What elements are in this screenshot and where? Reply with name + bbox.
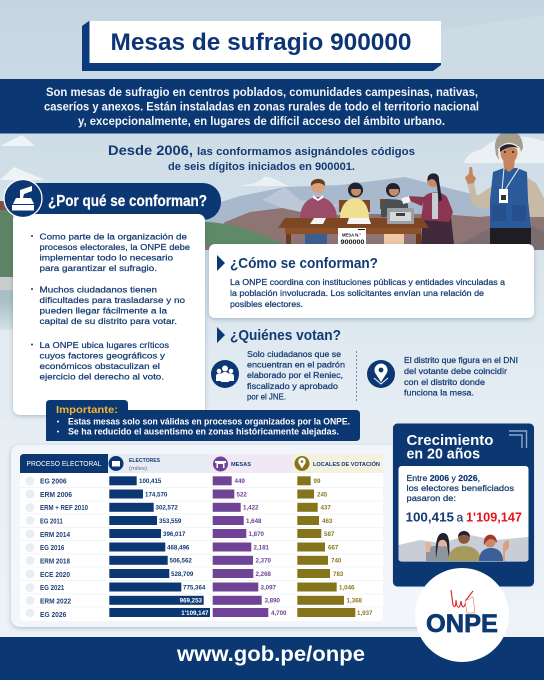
row labels: ERM 2006 [40,490,72,499]
bar chart: mesas [213,476,287,617]
table header [20,454,383,473]
table header: LOCALES DE VOTACIÓN [313,460,380,468]
table header: PROCESO ELECTORAL [26,459,102,468]
panel: cómo se conforman [209,244,534,318]
bar chart: locales de votación: 437 [320,505,331,512]
text: distrito: El distrito que figura en el DNI [404,355,518,365]
panel: cómo se conforman: La ONPE coordina con instituciones públicas y entidades vinculadas a [230,278,505,287]
panel: crecimiento en 20 años [392,423,534,587]
panel: cómo se conforman: posibles electores. [230,300,303,309]
text: ciudadanos [247,349,345,402]
row labels: ECE 2020 [40,570,70,579]
icon: location pin [367,360,395,388]
bar chart: locales de votación: 99 [314,478,321,485]
row labels: ERM + REF 2010 [40,503,88,512]
icon: ballot box [4,180,42,218]
sign: mesa number: MESA N.° [342,232,361,238]
subtitle: desde 2006: las conformamos asignándoles códigos [197,146,415,158]
row labels: EG 2006 [40,476,67,486]
bar chart: locales de votación: 463 [322,518,333,525]
panel: cómo se conforman: ¿Cómo se conforman? [230,255,378,272]
bar chart: mesas: 1,648 [246,518,262,525]
bar chart: electores: 302,572 [156,505,178,512]
white box: 100,415 [406,510,454,524]
footer [0,637,544,680]
heading: en 20 años [406,446,480,462]
text: ciudadanos: por el JNE. [247,392,286,402]
heading pill [20,183,221,220]
bar chart: mesas: 2,268 [256,571,272,578]
sign: mesa number [338,228,366,246]
card body: Como parte de la organización de [40,232,187,242]
subtitle: desde 2006: de seis dígitos iniciados en 900001. [168,161,355,173]
callout: importante [46,400,360,441]
bar chart: mesas: 3,097 [260,584,277,591]
row labels: EG 2021 [40,583,64,592]
subtitle: desde 2006 [108,142,415,173]
card body: La ONPE ubica lugares críticos [40,340,169,350]
row labels [40,476,88,619]
table card [11,445,481,627]
callout: importante: Importante: [56,405,118,416]
bar chart: electores: 353,559 [159,518,182,525]
bar chart: electores: 1'109,147 [181,610,209,617]
text: distrito: con el distrito donde [404,377,485,387]
heading [406,433,494,462]
card body: ejercicio del derecho al voto. [40,372,164,382]
bar chart: electores: 468,496 [167,544,190,551]
sign: mesa number: 900000 [340,239,365,246]
text: ciudadanos: Solo ciudadanos que se [247,349,341,359]
panel: quiénes votan [211,327,518,402]
bar chart: locales de votación: 1,046 [339,584,355,591]
row labels: EG 2011 [40,516,63,526]
icon: people [211,360,239,388]
bar chart: locales de votación: 1,368 [346,598,363,605]
text: ciudadanos: encuentran en el padrón [247,360,345,370]
man at the table [300,179,337,219]
white box [398,466,528,562]
bar chart: mesas: 2,370 [256,558,272,565]
bar chart: mesas: 4,700 [271,610,287,617]
text: distrito [404,355,518,398]
bar chart: locales de votación: 587 [324,531,335,538]
bar chart: mesas: 1,870 [248,531,265,538]
woman in grey [380,183,408,217]
text: ciudadanos: fiscalizado y aprobado [247,381,338,391]
logo: ONPE [415,568,509,662]
bar chart: electores: 506,562 [170,558,192,565]
bar chart: electores: 969,253 [180,598,203,605]
panel: por qué se conforman [4,180,221,415]
title [82,21,441,71]
bar chart: mesas: 3,890 [264,598,281,605]
heading pill: ¿Por qué se conforman? [48,193,207,210]
text: distrito: del votante debe coincidir [404,366,507,376]
row markers [26,476,34,618]
bar chart: locales de votación: 245 [317,491,328,498]
subtitle: desde 2006: Desde 2006, [108,142,193,158]
heading: Crecimiento [406,433,494,449]
text: ciudadanos: elaborado por el Reniec, [247,370,343,380]
title: Mesas de sufragio 900000 [110,29,412,56]
callout: importante: Estas mesas solo son válidas en procesos organizados por la ONPE. [68,416,350,426]
table with ballot box [278,208,429,246]
card body: cuyos factores geográficos y [40,350,166,360]
bar chart: electores: 775,364 [183,584,206,591]
bar chart: electores [109,476,210,617]
woman in yellow [339,182,370,219]
bar chart: locales de votación: 783 [333,571,344,578]
white box: 1'109,147 [466,510,522,524]
bar chart: locales de votación: 1,937 [357,610,373,617]
card body: implementar todo lo necesario [40,252,173,262]
text: distrito: funciona la mesa. [404,388,474,398]
intro band: Son mesas de sufragio en centros poblados, comunidades campesinas, nativas, [46,85,478,99]
row separators [20,488,383,607]
card body: procesos electorales, la ONPE debe [40,242,190,252]
bar chart: electores: 396,017 [163,531,186,538]
illustration: polling table with officials and poll worker [278,125,544,246]
table header: MESAS [231,462,251,468]
bar chart: electores: 174,570 [145,491,168,498]
callout: importante: Se ha reducido el ausentismo en zonas históricamente alejadas. [68,426,339,436]
white box: pasaron de: [406,494,456,503]
intro band: y, excepcionalmente, en lugares de difícil acceso del ámbito urbano. [78,114,445,128]
bar chart: mesas: 522 [236,491,247,498]
table header: ELECTORES [129,458,160,464]
card body: dificultades para trasladarse y no [40,295,185,305]
white box: a [456,510,464,524]
card body: capital de su distrito para votar. [40,316,177,326]
bar chart: mesas: 1,422 [243,505,259,512]
standing voter woman [401,173,454,244]
table header: (miles) [129,466,147,472]
bar chart: electores: 100,415 [139,478,162,485]
card body [13,214,205,415]
mountains and beneficiaries illustration [398,531,528,561]
bar chart: locales de votación: 740 [331,558,342,565]
bar chart: locales de votación: 667 [328,544,339,551]
icon: corner brackets [509,431,526,448]
logo: ONPE: ONPE [426,610,498,638]
card body: pueden llegar fácilmente a la [40,306,167,316]
bar chart: mesas: 2,181 [254,544,270,551]
bar chart: locales de votación [297,476,373,617]
white box: los electores beneficiados [406,484,514,493]
arrow marker [217,255,225,271]
bar chart: mesas: 449 [234,478,245,485]
panel: quiénes votan: ¿Quiénes votan? [230,327,341,344]
arrow marker [217,327,225,343]
row labels: ERM 2022 [40,596,71,606]
footer: www.gob.pe/onpe [176,643,365,666]
card body: económicos obstaculizan el [40,361,160,371]
row labels: EG 2016 [40,543,64,552]
panel: cómo se conforman: la población involucrada. Los solicitantes envían una relación de [230,289,484,298]
intro band: caseríos y anexos. Están instaladas en zonas rurales de todo el territorio nacional [44,100,479,114]
bar chart: electores: 528,709 [171,571,194,578]
white box: Entre 2006 y 2026, [406,474,480,483]
card body: Muchos ciudadanos tienen [40,284,157,294]
row labels: ERM 2018 [40,556,70,566]
row labels: EG 2026 [40,610,66,619]
poll worker in vest [465,125,544,245]
card body: para garantizar el sufragio. [40,263,157,273]
row labels: ERM 2014 [40,530,70,539]
intro band [0,79,544,134]
